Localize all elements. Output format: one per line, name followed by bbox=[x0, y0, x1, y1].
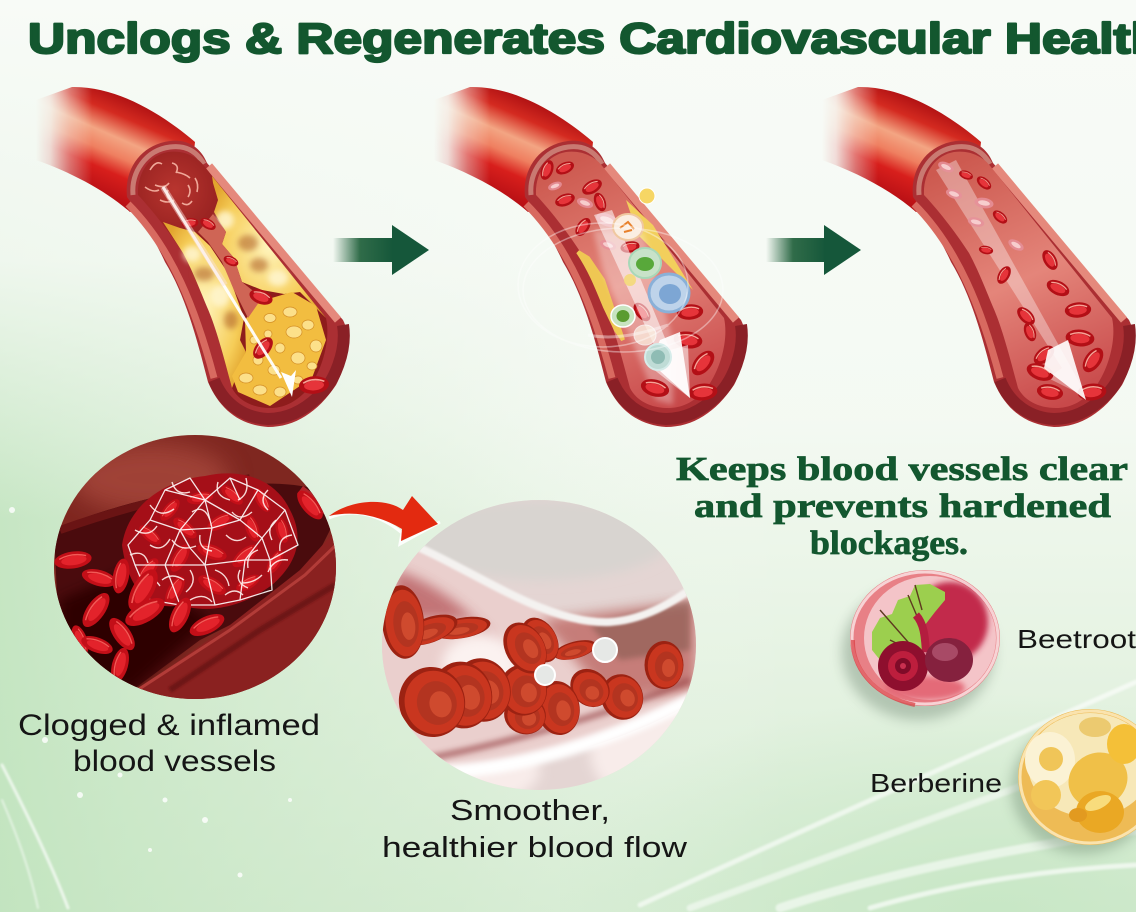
heading: keeps blood vessels clear bbox=[676, 451, 1128, 562]
caption: smoother healthier flow bbox=[382, 795, 688, 864]
label: Beetroot: Beetroot bbox=[1017, 624, 1136, 654]
vessel 1: clogged artery with plaque bbox=[36, 87, 348, 427]
circle: healthy blood flow bbox=[382, 500, 696, 790]
label: Berberine: Berberine bbox=[870, 768, 1002, 798]
free red blood cells bbox=[53, 486, 327, 684]
caption: smoother healthier flow: healthier blood flow bbox=[382, 832, 688, 864]
heading: keeps blood vessels clear: blockages. bbox=[810, 525, 968, 562]
artery wall bbox=[913, 141, 1134, 427]
lumen bbox=[536, 152, 725, 408]
energy swirl bbox=[518, 223, 723, 352]
blood clot bbox=[122, 473, 298, 609]
caption: clogged and inflamed: Clogged & inflamed bbox=[18, 709, 320, 742]
nutrient bubbles bbox=[611, 188, 689, 370]
circle: clogged vessel with clot bbox=[50, 430, 340, 705]
heading: keeps blood vessels clear: Keeps blood vessels clear bbox=[676, 451, 1128, 488]
tube exterior bbox=[36, 87, 195, 212]
caption: smoother healthier flow: Smoother, bbox=[450, 795, 610, 827]
tube exterior bbox=[434, 87, 593, 212]
arrow 1 bbox=[333, 225, 429, 275]
tube exterior bbox=[822, 87, 981, 212]
ingredient: berberine oil bubble bbox=[1011, 709, 1136, 854]
caption: clogged and inflamed bbox=[18, 709, 320, 778]
caption: clogged and inflamed: blood vessels bbox=[73, 745, 276, 778]
heading: keeps blood vessels clear: and prevents hardened bbox=[694, 488, 1111, 525]
ingredient: beetroot bubble bbox=[842, 570, 1000, 720]
vessel 3: clear artery bbox=[822, 87, 1134, 427]
artery wall bbox=[525, 141, 746, 427]
arrow 2 bbox=[766, 225, 861, 275]
red blood cells bbox=[379, 584, 684, 745]
lumen with plaque bbox=[138, 152, 330, 408]
title: Unclogs & Regenerates Cardiovascular Health bbox=[28, 15, 1136, 63]
lumen bbox=[924, 152, 1113, 408]
vessel interior bbox=[382, 548, 696, 772]
red curved arrow bbox=[329, 496, 440, 544]
artery wall bbox=[127, 141, 348, 427]
vessel 2: artery being cleared bbox=[434, 87, 746, 427]
